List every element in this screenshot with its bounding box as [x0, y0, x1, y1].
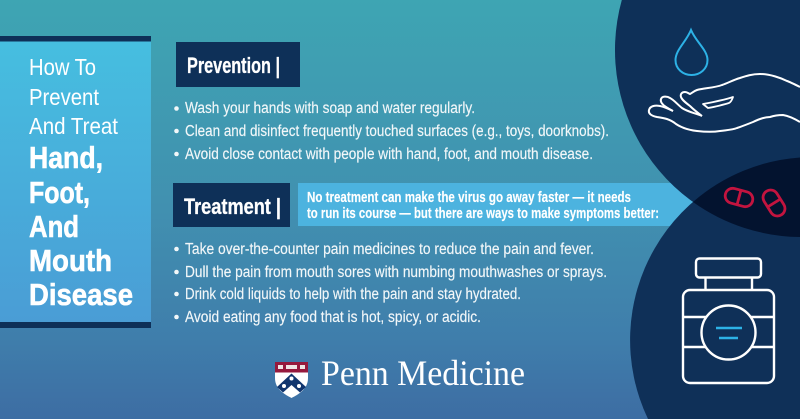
heading: prevention — [176, 42, 300, 87]
callout: No treatment can make the virus go away faster — it needs — [307, 190, 631, 206]
icon: pill right — [760, 187, 788, 219]
title: disease name: And — [29, 209, 79, 244]
callout — [298, 183, 698, 226]
title: intro: And Treat — [29, 113, 119, 139]
treatment list: Take over-the-counter pain medicines to reduce the pain and fever. — [185, 241, 594, 258]
prevention list: Avoid close contact with people with hand, foot, and mouth disease. — [185, 146, 593, 163]
title: intro: Prevent — [29, 84, 100, 110]
title: disease name: Mouth — [29, 243, 112, 278]
icon: water drop — [676, 30, 708, 75]
title: disease name: Disease — [29, 277, 133, 312]
icon: pill left — [724, 187, 754, 208]
heading: treatment: Treatment | — [184, 194, 281, 219]
treatment list: Dull the pain from mouth sores with numbing mouthwashes or sprays. — [185, 264, 607, 281]
circle: top — [615, 0, 800, 237]
circle overlap — [693, 158, 800, 237]
icon: hand — [649, 74, 800, 132]
title: disease name: Hand, — [29, 140, 103, 175]
treatment list: Drink cold liquids to help with the pain and stay hydrated. — [185, 286, 521, 303]
heading: treatment — [173, 183, 290, 227]
title: disease name — [29, 140, 133, 312]
logo: penn medicine — [275, 353, 525, 398]
logo: wordmark: Penn Medicine — [321, 353, 525, 393]
callout: to run its course — but there are ways to make symptoms better: — [307, 206, 659, 222]
title: intro: How To — [29, 54, 96, 80]
treatment list — [174, 241, 607, 326]
title: disease name: Foot, — [29, 175, 90, 210]
heading: prevention: Prevention | — [187, 53, 280, 78]
treatment list: Avoid eating any food that is hot, spicy, or acidic. — [185, 309, 481, 326]
prevention list: Wash your hands with soap and water regularly. — [185, 100, 475, 117]
prevention list — [174, 100, 609, 163]
panel: title — [0, 36, 151, 328]
icon: medicine bottle — [683, 258, 774, 383]
circle: bottom — [630, 158, 800, 419]
logo: shield — [275, 362, 308, 398]
prevention list: Clean and disinfect frequently touched surfaces (e.g., toys, doorknobs). — [185, 123, 609, 140]
title: intro — [29, 54, 119, 139]
icon: palm crease — [703, 97, 733, 108]
